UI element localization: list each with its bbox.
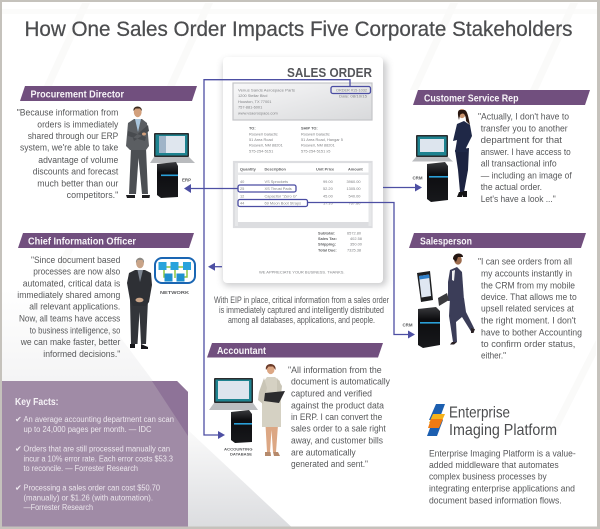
quote bbox=[17, 255, 121, 359]
CRM label: CRM bbox=[402, 322, 413, 328]
quote: in ERP. I can convert the bbox=[291, 412, 382, 422]
logo wordmark: Enterprise bbox=[449, 404, 510, 422]
fact: order cost bbox=[15, 483, 161, 512]
line item table: Capacitor "Zero G" bbox=[264, 194, 298, 198]
shipping address: SHIP TO: bbox=[301, 126, 318, 130]
quote: "Because information from bbox=[17, 108, 118, 118]
ERP label: ERP bbox=[182, 178, 191, 182]
description: document based information flows. bbox=[429, 495, 562, 505]
highlight: line item 25 bbox=[238, 185, 296, 192]
heading: Accountant bbox=[217, 346, 267, 357]
quote: we can make faster, better bbox=[20, 337, 120, 347]
shipping address bbox=[301, 126, 343, 154]
arrow: document to network bbox=[208, 263, 222, 271]
icon: accounting database server bbox=[231, 410, 252, 443]
heading: Chief Information Officer bbox=[28, 236, 136, 248]
quote: sales order to a sale right bbox=[291, 424, 386, 434]
sales order document bbox=[223, 57, 387, 286]
fact: error rate: incur a 10% error rate. Each error costs $53.3 bbox=[24, 454, 174, 463]
quote: transfer you to another bbox=[481, 123, 568, 133]
quote: upsell related services at bbox=[481, 304, 574, 314]
quote: all relevant applications. bbox=[29, 302, 120, 312]
totals: Total Due: bbox=[318, 248, 337, 252]
shipping address: Roswell Galactic bbox=[301, 132, 330, 136]
icon: mobile phone bbox=[417, 271, 433, 302]
caption bbox=[214, 295, 389, 325]
quote: the right moment. I don't bbox=[481, 315, 577, 325]
quote: informed decisions." bbox=[43, 349, 120, 359]
heading bbox=[20, 86, 197, 101]
line item table: Unit Price bbox=[316, 166, 335, 172]
quote: competitors." bbox=[67, 190, 118, 200]
line item table: 52.20 bbox=[323, 186, 334, 191]
line item table: 540.00 bbox=[348, 194, 361, 198]
totals bbox=[318, 230, 363, 252]
caption: is immediately captured and intelligently distributed bbox=[219, 305, 384, 315]
panel: accountant bbox=[207, 343, 391, 469]
shipping address: Roswell, NM 88201 bbox=[301, 142, 335, 148]
billing address: Roswell Galactic bbox=[249, 132, 278, 136]
fact: order cost: —Forrester Research bbox=[24, 503, 93, 512]
quote: document is automatically bbox=[291, 377, 391, 387]
line item table: 44 bbox=[240, 200, 245, 206]
panel: enterprise imaging platform bbox=[427, 404, 576, 505]
fact: order cost: ✔ bbox=[15, 483, 22, 492]
quote bbox=[478, 257, 582, 361]
connector: order number to accounting database bbox=[204, 80, 350, 439]
line item table: 17.10 bbox=[323, 200, 334, 206]
line item table: Amount bbox=[348, 166, 363, 172]
fact: error rate: ✔ bbox=[15, 444, 22, 453]
quote: captured and verified bbox=[291, 388, 372, 398]
totals: Subtotal: bbox=[318, 230, 335, 236]
quote: to confirm order status, bbox=[481, 339, 575, 349]
line item table: XS Thrust Pads bbox=[264, 186, 292, 191]
heading bbox=[207, 343, 383, 358]
shipping address: 51 Area Road, Hangar 5 bbox=[301, 137, 343, 142]
quote: are automatically bbox=[291, 447, 356, 457]
icon: laptop bbox=[412, 135, 453, 162]
totals: 402.58 bbox=[350, 236, 362, 241]
totals: 350.00 bbox=[350, 242, 363, 246]
quote: "All information from the bbox=[288, 365, 382, 375]
line item table: 45.00 bbox=[323, 194, 334, 198]
figure: businessman arms crossed bbox=[126, 106, 150, 198]
line item table: 767.80 bbox=[348, 200, 361, 206]
fact: error rate: Orders that are still processed manually can bbox=[24, 444, 170, 453]
icon: laptop bbox=[150, 133, 195, 163]
figure: businesswoman on phone bbox=[438, 253, 475, 344]
CRM label: CRM bbox=[412, 176, 423, 180]
quote: Now, all teams have access bbox=[19, 314, 121, 324]
fact: pages per month: ✔ bbox=[15, 415, 22, 424]
sender address box: Houston, TX 77001 bbox=[238, 99, 271, 104]
heading bbox=[409, 233, 586, 248]
heading: Key Facts: bbox=[15, 396, 58, 408]
line item table bbox=[234, 162, 372, 227]
quote: the actual order. bbox=[481, 182, 542, 192]
line item table: 1305.00 bbox=[346, 186, 361, 191]
connector: line item to salesperson CRM bbox=[308, 202, 415, 338]
sender address box: www.vsaerospace.com bbox=[238, 110, 278, 116]
heading: Salesperson bbox=[420, 236, 472, 248]
line item table: 69 Moon Boot Straps bbox=[264, 200, 301, 206]
arrow: document to customer service CRM bbox=[383, 184, 422, 192]
sender address box: 757-881-6001 bbox=[238, 104, 262, 110]
title: How One Sales Order Impacts Five Corporate Stakeholders bbox=[24, 17, 572, 41]
quote: automated, critical data is bbox=[23, 278, 121, 288]
quote: advantage of volume bbox=[38, 155, 118, 165]
quote: my accounts instantly in bbox=[481, 269, 572, 279]
caption: With EIP in place, critical information from a sales order bbox=[214, 295, 389, 305]
quote: immediately shared among bbox=[17, 290, 120, 300]
icon: CRM server bbox=[418, 307, 440, 348]
panel: key facts bbox=[2, 381, 188, 526]
billing address: TO: bbox=[249, 126, 256, 130]
quote: have to bother Accounting bbox=[481, 327, 582, 337]
quote: system, we're able to take bbox=[20, 143, 118, 153]
logo wordmark: Imaging Platform bbox=[449, 422, 557, 439]
quote: away, and customer bills bbox=[291, 435, 384, 445]
document heading: SALES ORDER bbox=[287, 65, 373, 80]
panel: chief information officer bbox=[17, 233, 195, 359]
highlight: order number bbox=[331, 86, 370, 94]
description: complex business processes by bbox=[429, 472, 547, 482]
fact: pages per month: An average accounting department can scan bbox=[24, 415, 174, 424]
quote: department for that bbox=[481, 135, 563, 145]
quote: all transactional info bbox=[481, 158, 557, 168]
fact: order cost: (manually) or $1.26 (with automation). bbox=[24, 493, 153, 502]
background triangle bbox=[188, 430, 291, 526]
logo icon bbox=[427, 404, 445, 436]
line item table: 25 bbox=[240, 186, 244, 191]
heading: Procurement Director bbox=[30, 90, 124, 100]
totals: Sales Tax: bbox=[318, 236, 337, 241]
accounting database label: DATABASE bbox=[230, 451, 252, 456]
line item table: 99.00 bbox=[323, 179, 334, 184]
accounting database label bbox=[224, 446, 252, 456]
totals: Shipping: bbox=[318, 242, 336, 246]
highlight: line item 44 bbox=[238, 200, 308, 206]
totals: 6572.80 bbox=[347, 230, 362, 236]
quote: either." bbox=[481, 351, 506, 361]
figure: woman with crossed arms bbox=[453, 109, 472, 197]
heading: Customer Service Rep bbox=[424, 94, 518, 104]
caption: among all databases, applications, and people. bbox=[228, 315, 375, 325]
accounting database label: ACCOUNTING bbox=[224, 446, 252, 451]
figure: accountant with clipboard bbox=[258, 364, 285, 456]
quote: "Since document based bbox=[31, 255, 120, 265]
thank-you note: WE APPRECIATE YOUR BUSINESS. THANKS. bbox=[259, 270, 344, 274]
fact: error rate: to reconcile. — Forrester Research bbox=[24, 464, 138, 473]
icon: ERP server bbox=[157, 162, 178, 198]
totals: 7325.38 bbox=[347, 248, 361, 252]
billing address: 575-254-5151 bbox=[249, 148, 273, 154]
fact: order cost: Processing a sales order can cost $50.70 bbox=[24, 483, 161, 492]
quote bbox=[288, 365, 391, 469]
line item table: 40 bbox=[240, 179, 245, 184]
figure: executive in dark suit bbox=[127, 258, 152, 349]
icon: CRM server bbox=[427, 162, 448, 202]
shipping address: 575-254-5151 x5 bbox=[301, 148, 330, 154]
heading bbox=[413, 90, 590, 105]
billing address: Roswell, NM 88201 bbox=[249, 142, 283, 148]
line item table: 3960.00 bbox=[346, 179, 361, 184]
quote: — including an image of bbox=[481, 170, 572, 180]
quote: "Actually, I don't have to bbox=[478, 112, 569, 122]
sender address box bbox=[233, 83, 372, 120]
fact: error rate bbox=[15, 444, 174, 473]
fact: pages per month bbox=[15, 415, 174, 434]
line item table: 12 bbox=[240, 194, 244, 198]
description: integrating enterprise applications and bbox=[429, 484, 575, 494]
description: added middleware that automates bbox=[429, 460, 559, 470]
description: Enterprise Imaging Platform is a value- bbox=[429, 448, 576, 458]
billing address bbox=[249, 126, 283, 154]
line item table: Description bbox=[264, 166, 287, 172]
icon: laptop bbox=[209, 378, 258, 410]
quote: device. That allows me to bbox=[481, 292, 577, 302]
icon: network bbox=[155, 258, 195, 283]
sender address box: Venus Sands Aerospace Parts bbox=[238, 88, 295, 92]
heading bbox=[18, 233, 194, 248]
panel: procurement director bbox=[17, 86, 197, 200]
quote: shared through our ERP bbox=[28, 131, 118, 141]
sender address box: ORDER #15-1032 bbox=[336, 88, 367, 92]
quote: the CRM from my mobile bbox=[481, 280, 575, 290]
sender address box: 1200 Stellar Blvd bbox=[238, 93, 267, 98]
line item table: VS Sprockets bbox=[264, 179, 288, 184]
connector: line item to ERP bbox=[184, 184, 238, 193]
quote: Let's have a look ..." bbox=[481, 194, 556, 204]
quote bbox=[17, 108, 119, 200]
fact: pages per month: up to 24,000 pages per month. — IDC bbox=[24, 425, 152, 434]
panel: customer service rep bbox=[412, 90, 590, 204]
quote: discounts and forecast bbox=[33, 167, 119, 177]
description bbox=[429, 448, 576, 505]
quote: generated and sent." bbox=[291, 459, 368, 469]
line item table: Quantity bbox=[240, 166, 257, 172]
quote: orders is immediately bbox=[37, 119, 119, 129]
quote: much better than our bbox=[37, 178, 118, 188]
quote: to business intelligence, so bbox=[30, 325, 120, 335]
quote: "I can see orders from all bbox=[478, 257, 572, 267]
quote bbox=[478, 112, 572, 204]
quote: against the product data bbox=[291, 400, 384, 410]
sender address box: Date: 08/10/15 bbox=[339, 94, 367, 98]
quote: answer. I have access to bbox=[481, 147, 571, 157]
panel: salesperson bbox=[402, 233, 586, 361]
logo wordmark bbox=[449, 404, 557, 439]
network label: NETWORK bbox=[160, 290, 190, 295]
billing address: 51 Area Road bbox=[249, 137, 273, 142]
quote: processes are now also bbox=[33, 267, 120, 277]
